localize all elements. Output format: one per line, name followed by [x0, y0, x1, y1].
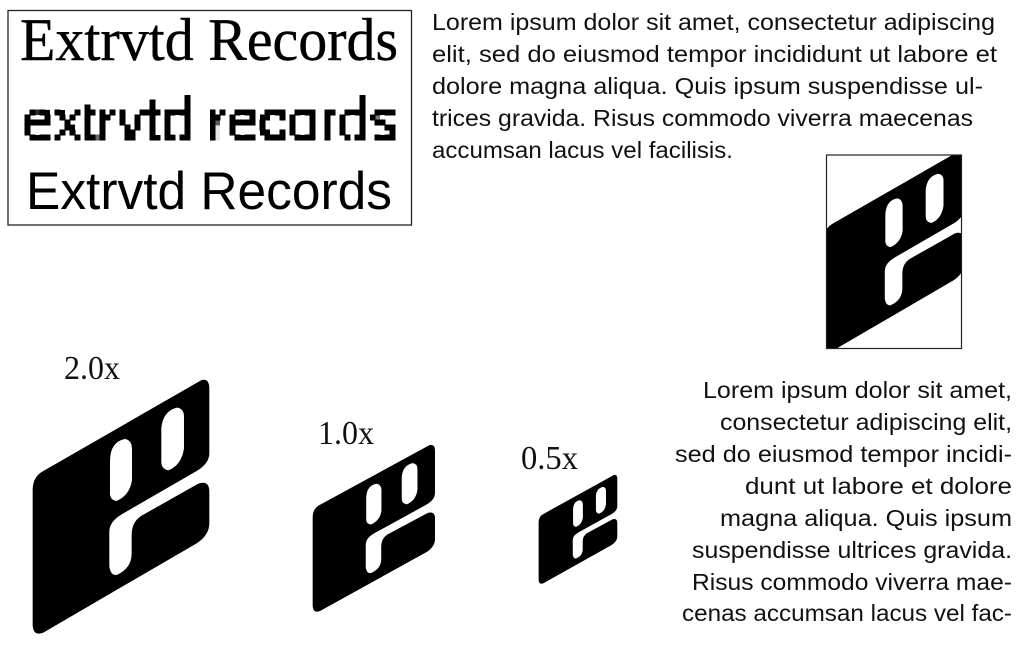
- icon: logo at 2.0x: [33, 380, 209, 634]
- text block: top paragraph: accumsan lacus vel facilisis.: [432, 137, 733, 163]
- text block: right-aligned paragraph: cenas accumsan lacus vel fac-: [682, 600, 1012, 626]
- text block: right-aligned paragraph: sed do eiusmod tempor incidi-: [675, 441, 1012, 467]
- text block: right-aligned paragraph: Lorem ipsum dolor sit amet,: [703, 377, 1012, 403]
- icon: logo at 1.0x: [313, 445, 435, 612]
- text block: top paragraph: [432, 9, 998, 163]
- text block: top paragraph: Lorem ipsum dolor sit amet, consectetur adipiscing: [432, 9, 995, 35]
- text block: right-aligned paragraph: Risus commodo viverra mae-: [692, 569, 1012, 595]
- icon: logo at 0.5x: [539, 475, 617, 584]
- text block: top paragraph: elit, sed do eiusmod tempor incididunt ut labore et: [432, 41, 998, 67]
- wordmark: pixel: extrvtd records: [22, 87, 398, 154]
- icon: logo in bounding box: [825, 152, 963, 351]
- text block: right-aligned paragraph: suspendisse ultrices gravida.: [692, 537, 1012, 563]
- wordmark: geometric: Extrvtd Records: [26, 162, 392, 221]
- text block: right-aligned paragraph: [675, 377, 1012, 626]
- panel: wordmark variations: [8, 7, 412, 225]
- text block: right-aligned paragraph: consectetur adipiscing elit,: [720, 409, 1012, 435]
- label: 2.0x: 2.0x: [64, 350, 120, 387]
- text block: right-aligned paragraph: dunt ut labore et dolore: [745, 473, 1012, 499]
- wordmark: serif: Extrvtd Records: [20, 7, 398, 73]
- label: 0.5x: 0.5x: [521, 440, 578, 477]
- text block: top paragraph: trices gravida. Risus commodo viverra maecenas: [432, 105, 973, 131]
- text block: right-aligned paragraph: magna aliqua. Quis ipsum: [720, 505, 1012, 531]
- label: 1.0x: 1.0x: [318, 415, 374, 452]
- text block: top paragraph: dolore magna aliqua. Quis ipsum suspendisse ul-: [432, 73, 983, 99]
